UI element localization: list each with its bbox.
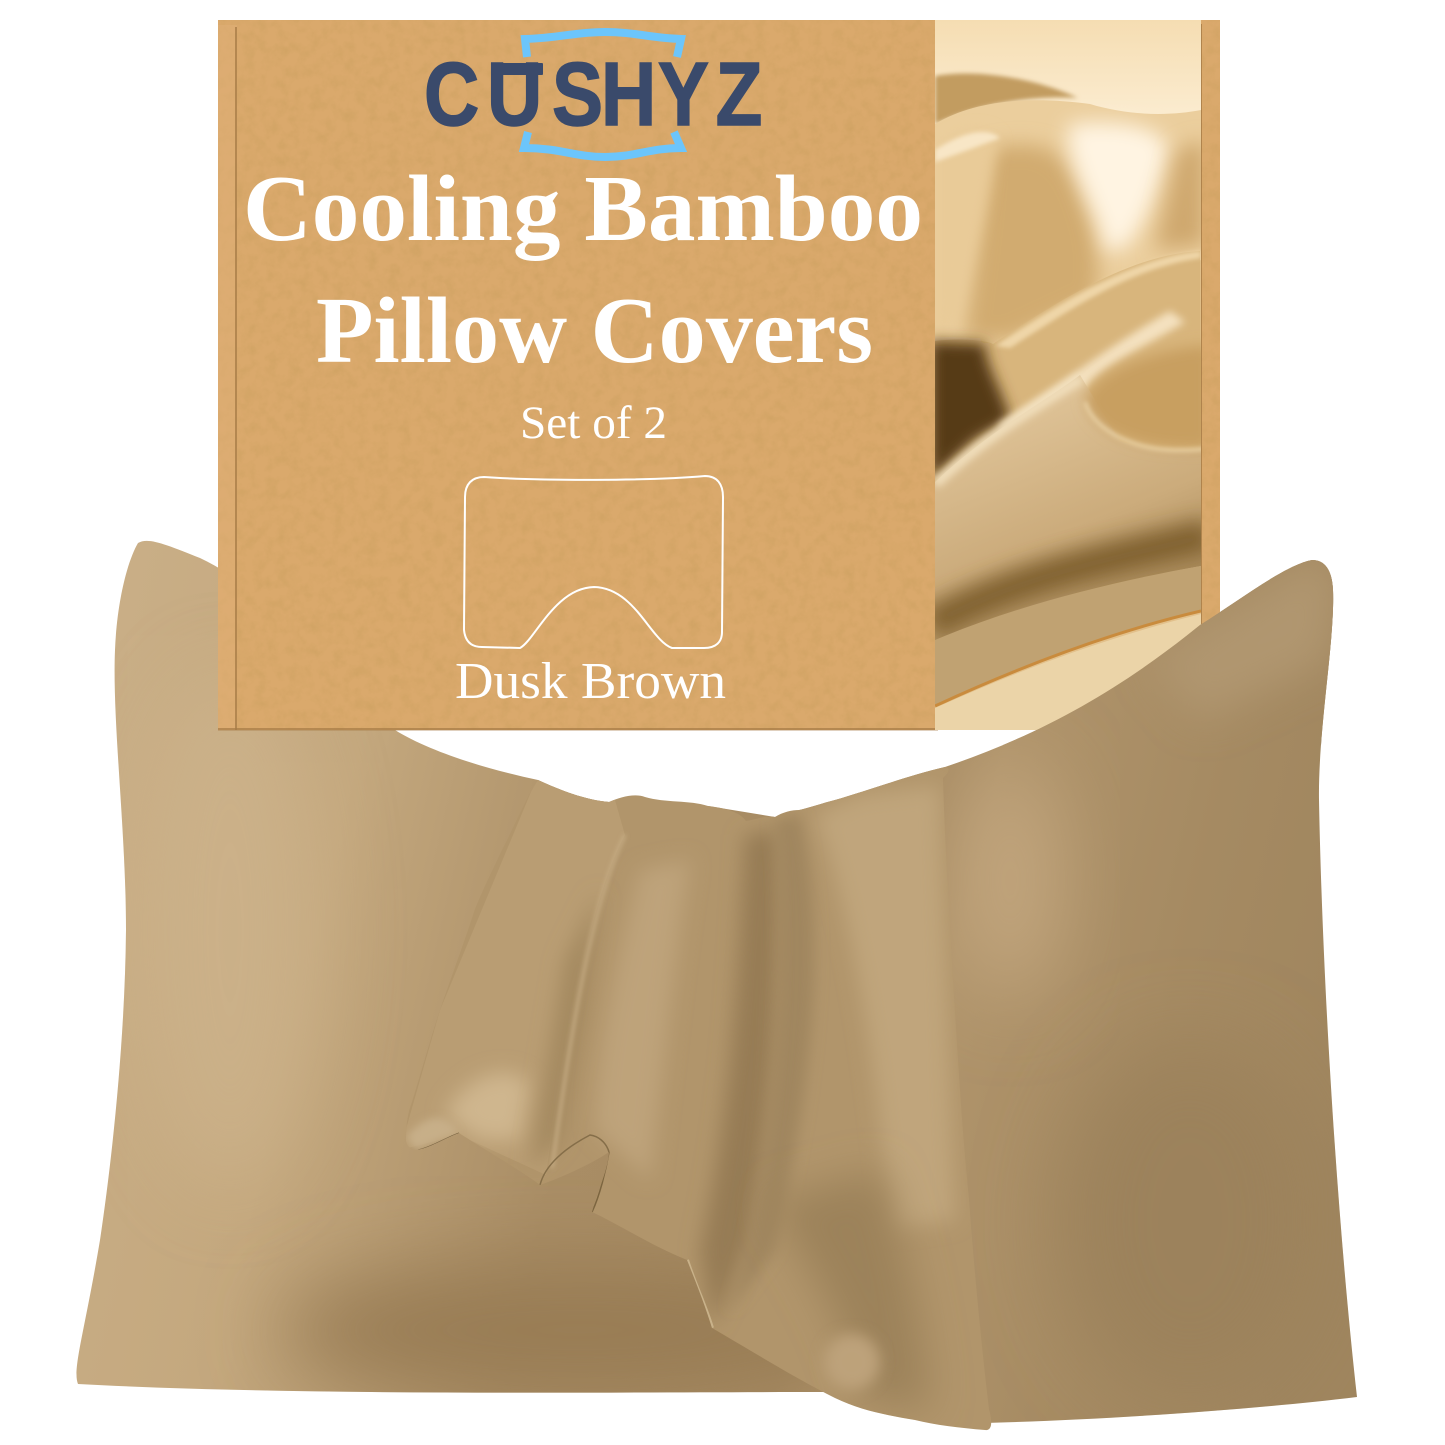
flap: left pocket: [538, 780, 614, 802]
flap: left fold highlight near edge: [552, 835, 625, 1168]
box: cardboard panel: [218, 20, 1220, 730]
flap: left pocket right shadow: [531, 918, 592, 1156]
logo: [424, 32, 762, 157]
icon: contour pillow outline: [464, 476, 723, 648]
box: right flap crease: [1200, 24, 1202, 624]
logo: U cap: [492, 63, 543, 75]
flap: right panel light: [815, 785, 955, 1230]
title line 1: Cooling Bamboo: [243, 157, 923, 261]
logo: bottom pillow bracket: [524, 132, 681, 157]
flap: centre panel highlight: [596, 865, 686, 1166]
flap: inner crease: [744, 814, 814, 1283]
title line 2: Pillow Covers: [316, 279, 873, 383]
flap: seam left: [418, 1133, 459, 1150]
subtitle: Set of 2: [520, 397, 667, 449]
box: satin fabric photo: [930, 20, 1210, 730]
box: bottom edge: [218, 728, 938, 730]
pillow: draped flap: [400, 760, 1000, 1440]
box: paper texture: [218, 20, 1220, 730]
flap: light notch edge: [687, 1260, 712, 1328]
flap: left pocket highlight: [445, 1073, 530, 1140]
flap: hem lower: [592, 1152, 609, 1212]
flap: bottom light patch: [824, 1334, 880, 1390]
logo: top pillow bracket: [525, 32, 681, 57]
pillow: right ear over box: [1003, 560, 1334, 745]
box: [218, 20, 1220, 730]
flap: fold to tip: [540, 1135, 609, 1185]
flap: base fabric: [538, 767, 992, 1430]
logo: wordmark: CUSHYZ: [424, 43, 762, 144]
box: left flap crease: [235, 27, 237, 730]
box: left side flap: [218, 25, 237, 730]
pillow: back body: [60, 530, 1370, 1440]
flap: lower shadow: [770, 1170, 930, 1410]
flap: centre shadow: [700, 830, 779, 1328]
flap: pocket hem: [406, 1118, 459, 1150]
colour name: Dusk Brown: [455, 653, 726, 710]
